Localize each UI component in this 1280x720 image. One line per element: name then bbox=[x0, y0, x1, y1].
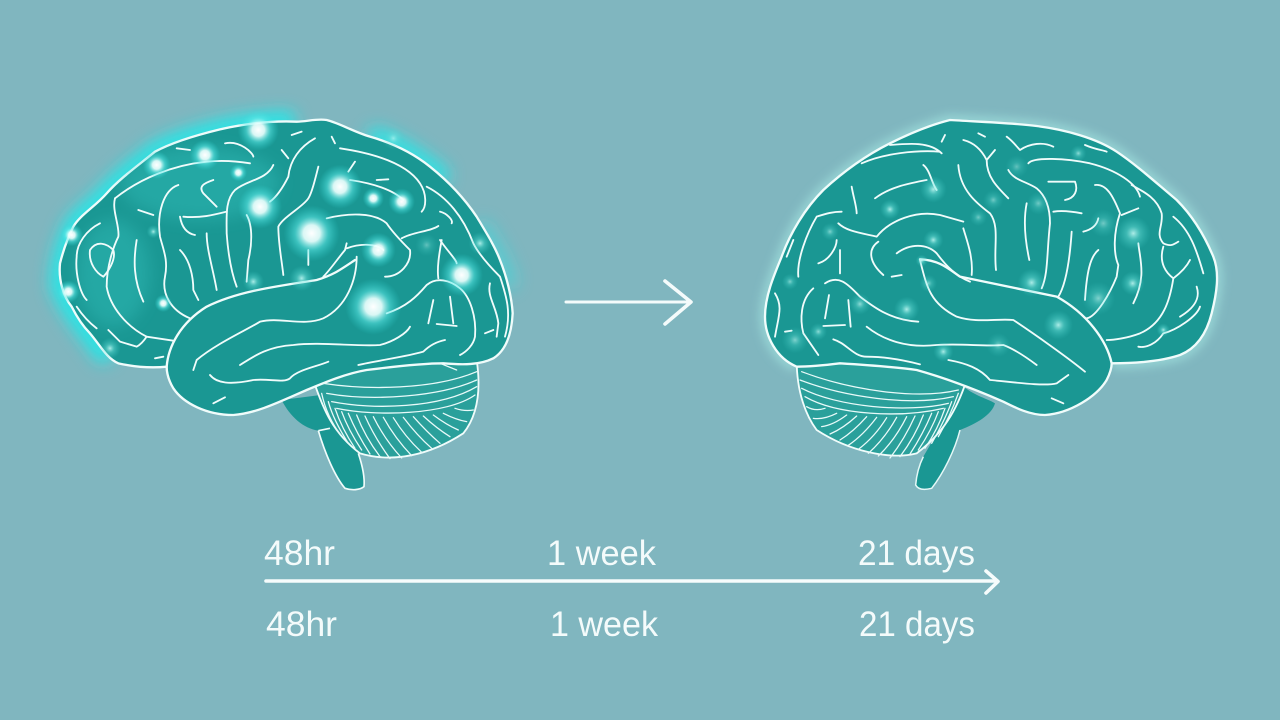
timeline label 21 days top: 21 days bbox=[858, 534, 975, 573]
left brain: high activity with bright glow bbox=[57, 109, 513, 490]
timeline label 21 days bottom: 21 days bbox=[859, 605, 975, 644]
right cerebrum bbox=[765, 120, 1217, 415]
right cerebellum bbox=[797, 360, 967, 456]
left brain inner haze bbox=[77, 147, 280, 327]
timeline label 1 week top: 1 week bbox=[547, 534, 656, 573]
timeline arrow bbox=[266, 571, 998, 593]
left brain glowing activity spots bbox=[57, 109, 491, 359]
right cerebellum folds bbox=[800, 372, 958, 458]
timeline label 1 week bottom: 1 week bbox=[550, 605, 658, 644]
left cerebellum folds bbox=[322, 363, 477, 459]
left cerebellum bbox=[313, 360, 479, 458]
left brain temporal lobe and folds bbox=[76, 132, 508, 403]
left brain outer cyan glow bbox=[60, 121, 508, 353]
right brainstem bbox=[916, 387, 995, 489]
right brain faint activity spots bbox=[782, 145, 1170, 362]
center arrow from left brain to right brain bbox=[566, 281, 691, 324]
timeline label 48hr top: 48hr bbox=[264, 534, 335, 573]
right brain outer pale glow bbox=[765, 120, 1217, 367]
right brain temporal lobe and folds bbox=[775, 133, 1203, 403]
timeline label 48hr bottom: 48hr bbox=[266, 605, 337, 644]
left cerebrum bbox=[60, 120, 513, 415]
right brain: calmer activity with soft glow bbox=[765, 120, 1217, 489]
left brainstem bbox=[282, 393, 364, 490]
timeline: labels above and below an arrow bbox=[264, 534, 998, 644]
